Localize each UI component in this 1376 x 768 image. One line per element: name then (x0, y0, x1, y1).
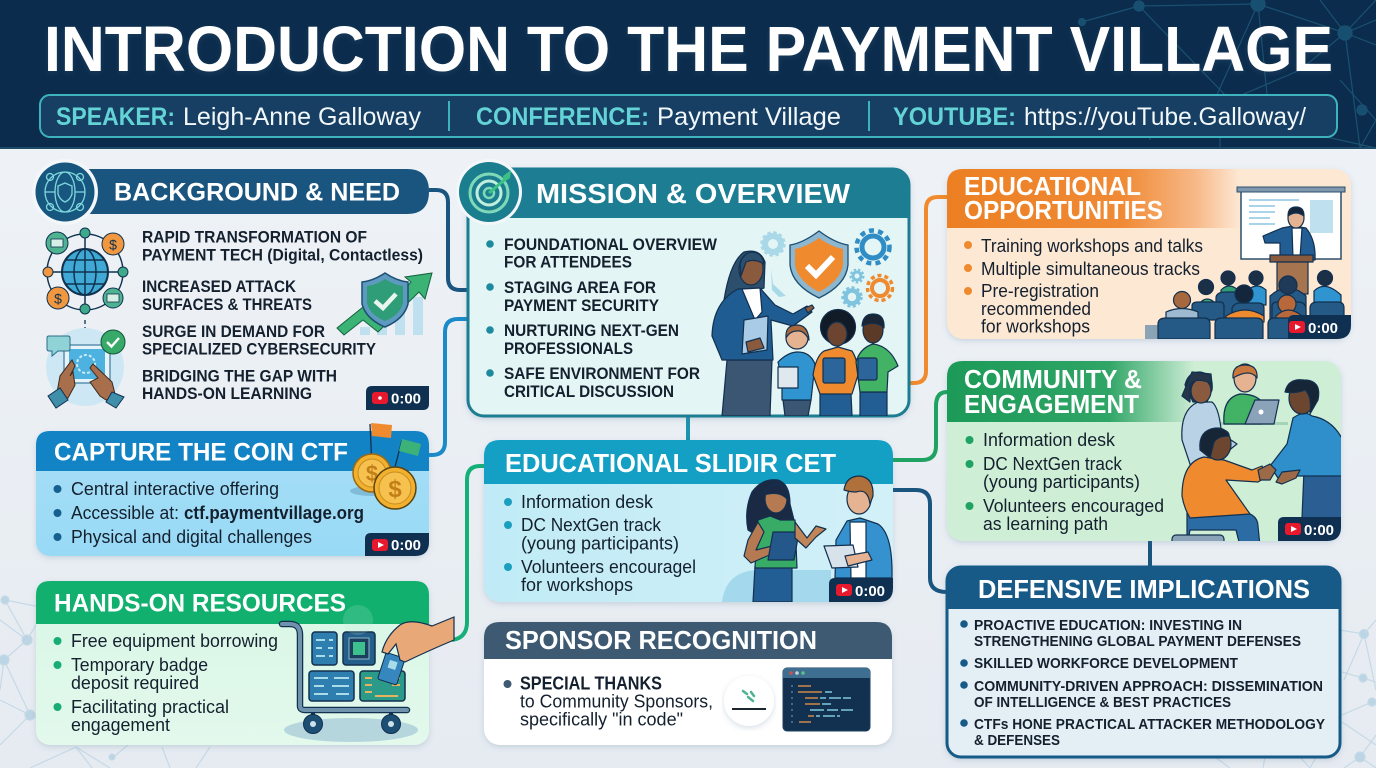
bullet list: (young participants) (983, 472, 1140, 492)
metadata bar: YOUTUBE: (893, 103, 1016, 131)
body text: SURFACES & THREATS (142, 296, 312, 314)
video timestamp badge (1278, 517, 1341, 541)
bullet list: SAFE ENVIRONMENT FOR (504, 365, 700, 383)
bullet list: Central interactive offering (71, 479, 279, 499)
sponsor text: specifically "in code" (520, 710, 683, 730)
bullet list: as learning path (983, 514, 1108, 534)
video timestamp badge: 0:00 (855, 583, 885, 600)
bullet list: Facilitating practical (71, 697, 229, 717)
panel: sponsor recognition (484, 622, 892, 745)
heading: CAPTURE THE COIN CTF (54, 438, 348, 466)
heading: MISSION & OVERVIEW (536, 178, 850, 209)
bullet list: (young participants) (521, 534, 679, 554)
teen green shirt (856, 314, 898, 416)
heading: EDUCATIONAL (964, 171, 1141, 201)
heading (484, 440, 893, 484)
body text: SURGE IN DEMAND FOR (142, 323, 325, 341)
heading (484, 622, 892, 659)
bullet list: STRENGTHENING GLOBAL PAYMENT DEFENSES (974, 633, 1301, 650)
bullet list: FOUNDATIONAL OVERVIEW (504, 236, 717, 254)
header network decoration (1078, 0, 1376, 148)
bullet list: Training workshops and talks (981, 236, 1203, 256)
metadata bar: SPEAKER: (56, 103, 175, 131)
bullet list: for workshops (981, 316, 1090, 336)
metadata bar: https://youTube.Galloway/ (1024, 103, 1306, 131)
icon: target (456, 159, 522, 225)
bullet list (966, 430, 1164, 534)
body text: PAYMENT TECH (Digital, Contactless) (142, 246, 423, 264)
heading (947, 361, 1195, 422)
heading (36, 581, 429, 624)
metadata bar: Leigh-Anne Galloway (183, 103, 421, 131)
woman mentor (712, 251, 814, 416)
heading: EDUCATIONAL SLIDIR CET (505, 448, 836, 478)
child orange shirt (813, 310, 858, 416)
illustration: speaker and audience (1145, 187, 1345, 339)
bullet list (964, 236, 1203, 336)
icon: coins and flags (350, 423, 421, 509)
heading (947, 169, 1240, 228)
audience (1145, 270, 1344, 339)
bullet list: STAGING AREA FOR (504, 279, 656, 297)
sponsor text (504, 674, 713, 730)
icon: payment network globe: $ (54, 290, 62, 306)
bullet list (54, 631, 278, 735)
bullet list (504, 492, 696, 595)
heading: COMMUNITY & (964, 364, 1142, 394)
heading: HANDS-ON RESOURCES (54, 590, 346, 618)
body text (142, 228, 423, 403)
bullet list: Pre-registration (981, 281, 1099, 301)
video timestamp badge (365, 533, 429, 556)
bullet list: & DEFENSES (974, 732, 1060, 749)
bullet list: DC NextGen track (521, 515, 662, 535)
bullet list: DC NextGen track (983, 454, 1123, 474)
body text: INCREASED ATTACK (142, 278, 296, 296)
header banner (0, 0, 1376, 149)
icon: payment network globe: $ (109, 236, 117, 252)
bullet list: Information desk (983, 430, 1116, 450)
panel: background & need (32, 159, 432, 410)
icon: hands on tablet (46, 320, 125, 408)
bullet list (54, 479, 364, 547)
heading: OPPORTUNITIES (964, 195, 1163, 225)
video timestamp badge (1288, 315, 1351, 339)
icon: payment network globe (43, 228, 128, 314)
video timestamp badge (829, 578, 893, 602)
bullet list (486, 236, 717, 401)
bullet list: Volunteers encouragel (521, 557, 696, 577)
body text: BRIDGING THE GAP WITH (142, 368, 337, 386)
heading (36, 431, 429, 471)
heading: ENGAGEMENT (964, 389, 1139, 419)
background network lines (0, 596, 1376, 768)
bullet list: NURTURING NEXT-GEN (504, 322, 679, 340)
heading (947, 567, 1340, 609)
icon: sponsor logo (724, 676, 774, 726)
heading: DEFENSIVE IMPLICATIONS (978, 574, 1310, 604)
bullet list: PAYMENT SECURITY (504, 297, 659, 315)
video timestamp badge: 0:00 (391, 537, 421, 554)
metadata bar: Payment Village (657, 103, 841, 131)
panel: defensive implications (947, 567, 1340, 757)
bullet list: deposit required (71, 673, 199, 693)
illustration: people shaking hands (1172, 364, 1345, 546)
bullet list: Free equipment borrowing (71, 631, 278, 651)
video timestamp badge: 0:00 (391, 390, 421, 408)
bullet list: SKILLED WORKFORCE DEVELOPMENT (974, 655, 1238, 672)
bullet list: PROACTIVE EDUCATION: INVESTING IN (974, 617, 1242, 634)
bullet list: ctf.paymentvillage.org (184, 503, 364, 523)
bullet list: Information desk (521, 492, 654, 512)
panel: mission & overview (456, 159, 909, 416)
title: INTRODUCTION TO THE PAYMENT VILLAGE (44, 13, 1333, 85)
panel: hands-on resources (36, 581, 454, 745)
bullet list (960, 617, 1325, 749)
body text: HANDS-ON LEARNING (142, 385, 312, 403)
bullet list: FOR ATTENDEES (504, 254, 632, 272)
connector arrows (429, 190, 1150, 640)
sponsor text: SPECIAL THANKS (520, 674, 662, 694)
icon: coins and flags: $ (388, 476, 402, 503)
bullet list: Temporary badge (71, 655, 208, 675)
sponsor text: to Community Sponsors, (520, 692, 713, 712)
body text: SPECIALIZED CYBERSECURITY (142, 340, 376, 358)
panel: educational opportunities (947, 169, 1351, 339)
icon: coins and flags: $ (366, 461, 378, 486)
bullet list: recommended (981, 299, 1091, 319)
icon: equipment cart and hand (282, 605, 454, 742)
icon: shield with growth arrow (337, 273, 432, 335)
panel: capture the coin ctf (36, 423, 429, 556)
bullet list: Accessible at: (71, 503, 179, 523)
bullet list: CTFs HONE PRACTICAL ATTACKER METHODOLOGY (974, 716, 1325, 733)
video timestamp badge: 0:00 (1308, 320, 1338, 337)
bullet list: COMMUNITY-DRIVEN APPROACH: DISSEMINATION (974, 678, 1323, 695)
video timestamp badge: 0:00 (1304, 522, 1334, 539)
bullet list: CRITICAL DISCUSSION (504, 383, 674, 401)
illustration: two people with tablets (722, 476, 892, 602)
metadata bar (40, 95, 1337, 137)
panel: community & engagement (947, 361, 1345, 546)
metadata bar: CONFERENCE: (476, 103, 649, 131)
bullet list: engagement (71, 715, 170, 735)
bullet list: OF INTELLIGENCE & BEST PRACTICES (974, 694, 1231, 711)
bullet list: Physical and digital challenges (71, 527, 312, 547)
video timestamp badge (366, 386, 429, 410)
heading (468, 169, 909, 218)
heading: SPONSOR RECOGNITION (505, 625, 817, 655)
illustration: mentor, students, shield and gears (712, 230, 898, 416)
heading bar: BACKGROUND & NEED (114, 178, 400, 206)
bullet list: Multiple simultaneous tracks (981, 259, 1200, 279)
child blue shirt (778, 325, 815, 416)
body text: RAPID TRANSFORMATION OF (142, 228, 367, 246)
bullet list: Volunteers encouraged (983, 496, 1164, 516)
panel: educational slidir cet (484, 440, 893, 602)
bullet list: PROFESSIONALS (504, 340, 633, 358)
bullet list: for workshops (521, 575, 633, 595)
icon: globe with shield (32, 159, 98, 225)
icon: code window (783, 668, 870, 731)
heading bar (70, 169, 429, 214)
